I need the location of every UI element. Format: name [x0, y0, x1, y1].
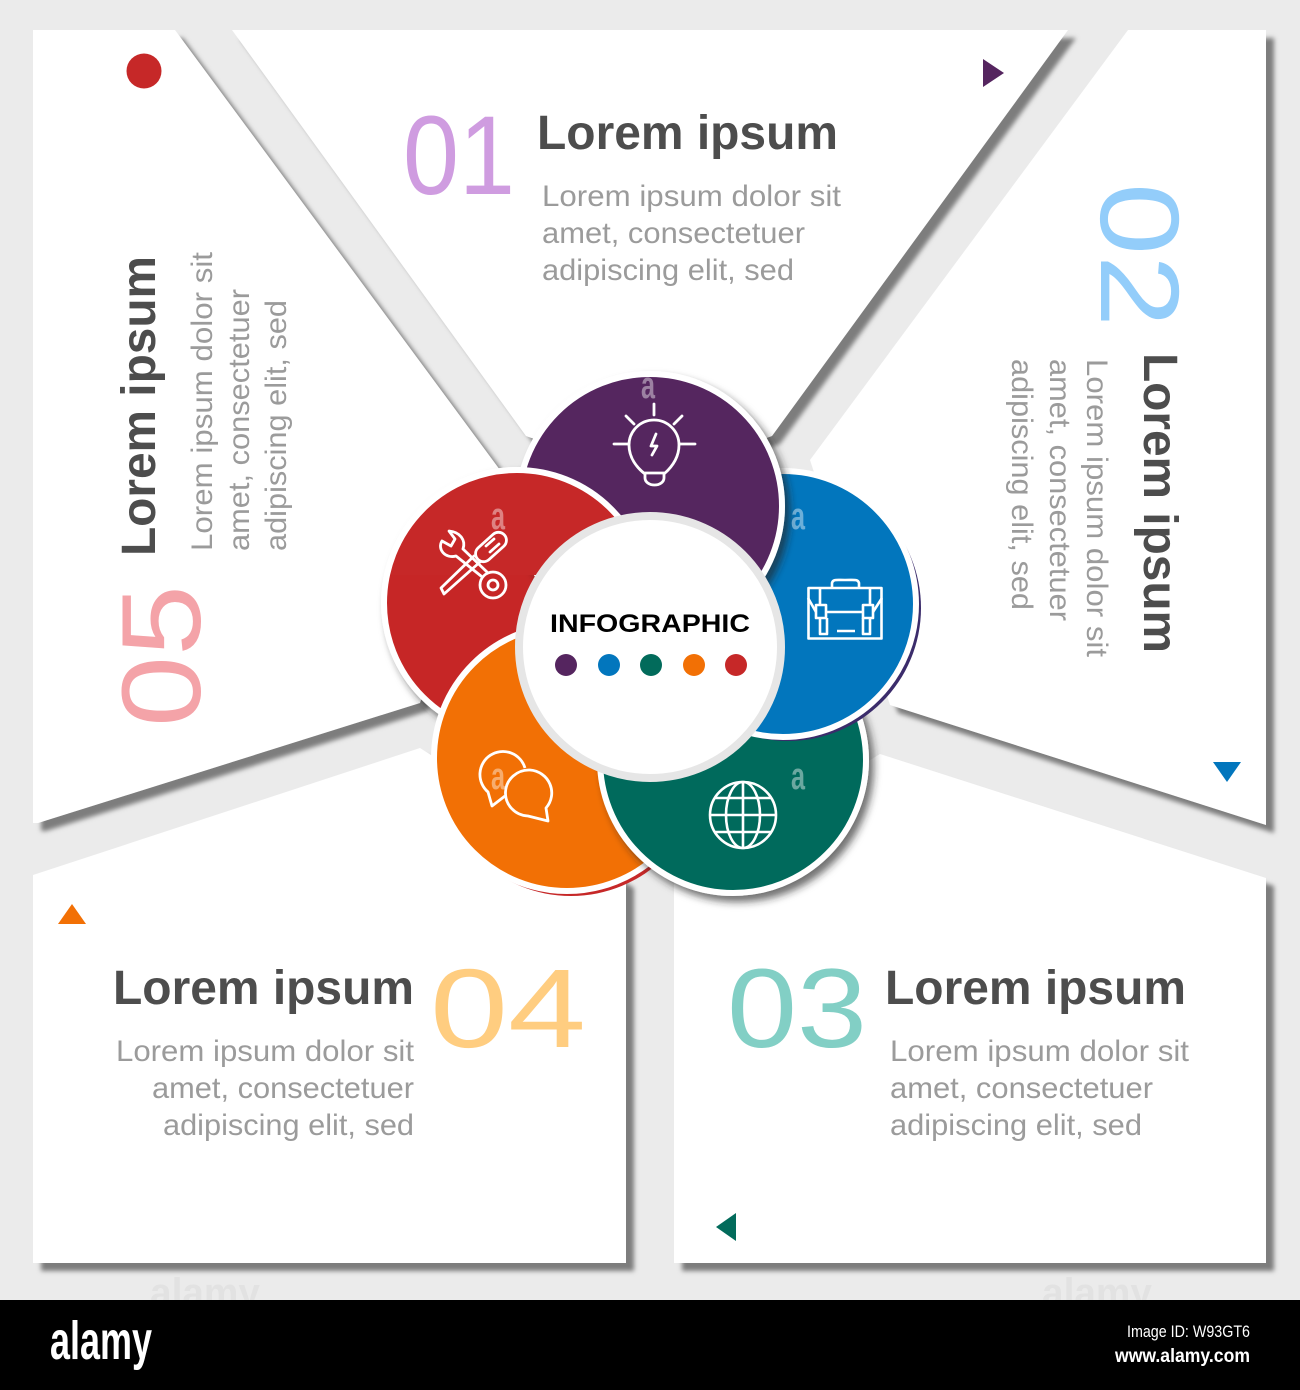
- text block 05: adipiscing elit, sed: [260, 300, 293, 551]
- panel: 01 top: [232, 30, 1068, 480]
- text block 05: Lorem ipsum dolor sit: [186, 251, 219, 551]
- text block 01: amet, consectetuer: [542, 217, 805, 250]
- text block 05: [186, 251, 293, 551]
- icon: chat bubbles: [480, 752, 552, 821]
- color dots: [555, 654, 747, 676]
- faint watermarks on background: alamy: [150, 1271, 261, 1315]
- heading 05: Lorem ipsum: [113, 256, 166, 556]
- number 05: 05: [99, 585, 224, 727]
- petal: red overlap over purple: [390, 467, 621, 575]
- petal: orange with red edge: [434, 625, 704, 896]
- icon: light bulb: [614, 404, 695, 485]
- marker: green triangle: [716, 1213, 736, 1241]
- text block 05: amet, consectetuer: [223, 289, 256, 551]
- petal: green: [600, 627, 866, 893]
- icon: briefcase: [808, 580, 882, 638]
- title: INFOGRAPHIC: [550, 610, 750, 638]
- petal: purple: [518, 374, 782, 638]
- watermarks on petals: a: [491, 496, 506, 538]
- footer logo: alamy: [50, 1311, 152, 1371]
- text block 02: Lorem ipsum dolor sit: [1080, 359, 1113, 658]
- petal: red: [384, 470, 650, 736]
- watermarks on petals: [491, 365, 806, 798]
- website: www.alamy.com: [1114, 1346, 1250, 1367]
- watermarks on petals: a: [791, 496, 806, 538]
- marker: orange triangle: [58, 904, 86, 924]
- text block 01: Lorem ipsum dolor sit: [542, 180, 842, 213]
- faint watermarks on background: [150, 1271, 1153, 1315]
- text block 03: Lorem ipsum dolor sit: [890, 1035, 1190, 1068]
- icon: tools: [440, 529, 510, 598]
- text block 04: adipiscing elit, sed: [163, 1109, 414, 1142]
- center hub: [519, 516, 781, 778]
- marker: purple triangle: [983, 59, 1004, 87]
- panel: 05 left: [33, 30, 500, 823]
- footer bar: [0, 1300, 1300, 1390]
- heading 03: Lorem ipsum: [885, 962, 1186, 1015]
- text block 01: adipiscing elit, sed: [542, 254, 794, 287]
- number 01: 01: [403, 93, 515, 218]
- marker: red dot: [126, 54, 162, 88]
- text block 03: adipiscing elit, sed: [890, 1109, 1142, 1142]
- heading 02: Lorem ipsum: [1133, 353, 1186, 653]
- image id: Image ID: W93GT6: [1127, 1322, 1250, 1341]
- faint watermarks on background: alamy: [1042, 1271, 1153, 1315]
- text block 02: [1005, 359, 1113, 658]
- text block 02: adipiscing elit, sed: [1005, 359, 1038, 610]
- number 03: 03: [727, 946, 867, 1071]
- panel: 03 bottom right: [674, 754, 1266, 1263]
- text block 04: [116, 1035, 415, 1142]
- text block 04: amet, consectetuer: [152, 1072, 414, 1105]
- text block 03: amet, consectetuer: [890, 1072, 1153, 1105]
- petal: blue with indigo edge: [650, 471, 921, 741]
- panel: 04 bottom left: [33, 748, 626, 1263]
- panel: 02 right: [810, 30, 1266, 825]
- text block 02: amet, consectetuer: [1043, 359, 1076, 621]
- icon: globe: [710, 782, 776, 848]
- watermarks on petals: a: [491, 756, 506, 798]
- number 02: 02: [1077, 183, 1202, 327]
- watermarks on petals: a: [791, 756, 806, 798]
- heading 04: Lorem ipsum: [113, 962, 414, 1015]
- text block 03: [890, 1035, 1190, 1142]
- number 04: 04: [430, 946, 586, 1071]
- text block 01: [542, 180, 842, 287]
- text block 04: Lorem ipsum dolor sit: [116, 1035, 415, 1068]
- watermarks on petals: a: [641, 365, 656, 407]
- heading 01: Lorem ipsum: [537, 107, 838, 160]
- marker: blue triangle: [1213, 762, 1241, 782]
